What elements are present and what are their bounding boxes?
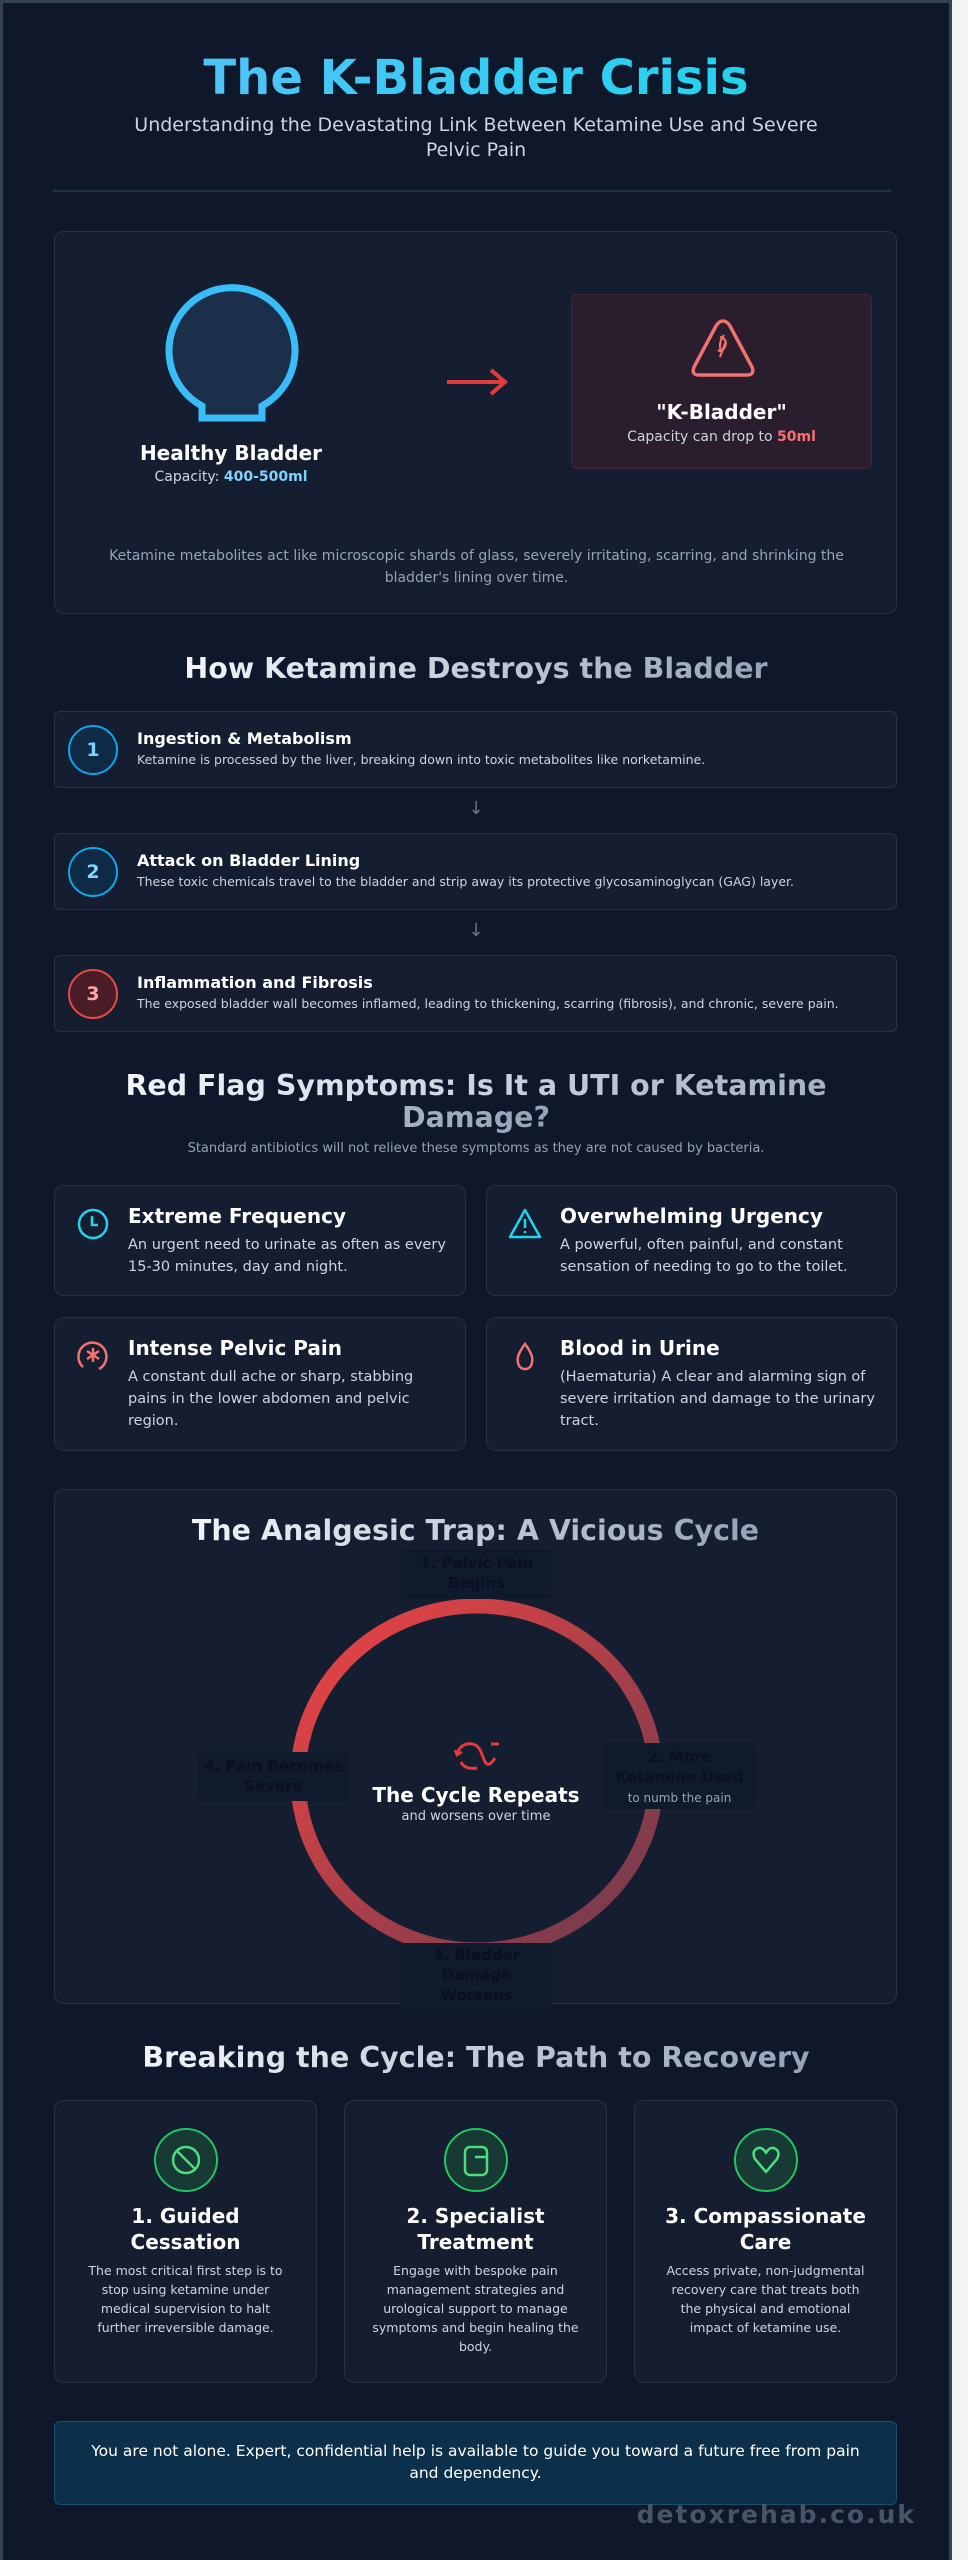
label 3: Worsens (440, 1986, 513, 2004)
symptoms subtitle: Standard antibiotics will not relieve these symptoms as they are not caused by bacteria. (188, 1141, 764, 1156)
label 4: Severe (244, 1777, 303, 1795)
step 1: 1 (86, 739, 100, 761)
description: Ketamine metabolites act like microscopic shards of glass, severely irritating, scarring, and shrinking the bladder's lining over time. (109, 548, 844, 586)
recovery 2: Treatment (417, 2230, 534, 2254)
symptom: blood in urine: Blood in Urine (560, 1336, 720, 1360)
label 4 (198, 1752, 349, 1801)
cycle heading: The Analgesic Trap: A Vicious Cycle (192, 1514, 759, 1547)
symptom: urgency: A powerful, often painful, and constant sensation of needing to go to the toilet. (560, 1237, 848, 1275)
callout: You are not alone. Expert, confidential help is available to guide you toward a future free from pain and dependency. (91, 2442, 860, 2482)
recovery 3: 3. Compassionate (665, 2204, 866, 2228)
label 1 (401, 1549, 552, 1599)
cycle ring (292, 1599, 661, 1944)
cycle center text: The Cycle Repeats (372, 1783, 580, 1807)
heading: red flag symptoms: Red Flag Symptoms: Is It a UTI or Ketamine Damage? (125, 1069, 827, 1134)
step 3: Inflammation and Fibrosis (137, 973, 373, 992)
panel: bladder comparison (54, 231, 897, 614)
label 1: 1. Pelvic Pain (420, 1554, 533, 1572)
label 2: Ketamine Used (616, 1768, 743, 1786)
cycle center text (372, 1783, 580, 1824)
label 2: to numb the pain (628, 1791, 731, 1805)
step 2 (54, 833, 897, 910)
icon: healthy bladder (166, 284, 298, 422)
cycle center text: and worsens over time (402, 1809, 550, 1824)
k-bladder box: Capacity can drop to 50ml (627, 429, 816, 445)
label 3: 3. Bladder (433, 1946, 520, 1964)
step 3: 3 (86, 983, 100, 1005)
step 2: 2 (86, 861, 100, 883)
recovery 2 (344, 2100, 607, 2383)
subtitle: Understanding the Devastating Link Between Ketamine Use and Severe Pelvic Pain (134, 114, 818, 161)
recovery 2: Engage with bespoke pain management strategies and urological support to manage symptoms and begin healing the body. (372, 2263, 579, 2354)
symptom: frequency: Extreme Frequency (128, 1204, 346, 1228)
recovery 1: Cessation (131, 2230, 240, 2254)
panel: vicious cycle (54, 1489, 897, 2004)
recovery 3 (634, 2100, 897, 2383)
recovery 1 (54, 2100, 317, 2383)
symptom: frequency: An urgent need to urinate as often as every 15-30 minutes, day and night. (128, 1237, 446, 1275)
k-bladder box (571, 294, 872, 469)
recovery 3: Access private, non-judgmental recovery care that treats both the physical and emotional impact of ketamine use. (666, 2263, 864, 2335)
symptom: frequency (54, 1185, 466, 1296)
step 2: Attack on Bladder Lining (137, 851, 360, 870)
heading: recovery: Breaking the Cycle: The Path to Recovery (142, 2041, 810, 2074)
label 2 (604, 1743, 755, 1809)
step 1: Ketamine is processed by the liver, breaking down into toxic metabolites like norketamine. (137, 752, 705, 767)
label 1: Begins (448, 1574, 505, 1592)
icon: cycle (454, 1742, 499, 1770)
label 3 (401, 1943, 552, 2011)
symptom: urgency (486, 1185, 897, 1296)
symptom: pelvic pain: Intense Pelvic Pain (128, 1336, 342, 1360)
healthy bladder label: Healthy Bladder (140, 441, 322, 465)
symptom: blood in urine: (Haematuria) A clear and alarming sign of severe irritation and damage to the urinary tract. (560, 1369, 875, 1429)
healthy bladder label: Capacity: 400-500ml (154, 469, 308, 485)
symptom: pelvic pain (54, 1317, 466, 1451)
arrow (447, 368, 508, 396)
label 4: 4. Pain Becomes (204, 1757, 343, 1775)
step 1: Ingestion & Metabolism (137, 729, 352, 748)
symptom: urgency: Overwhelming Urgency (560, 1204, 823, 1228)
recovery 1: 1. Guided (131, 2204, 240, 2228)
step 1 (54, 711, 897, 788)
arrow down: ↓ (468, 798, 484, 819)
heading: how ketamine destroys: How Ketamine Destroys the Bladder (184, 652, 768, 685)
recovery 3: Care (740, 2230, 791, 2254)
healthy bladder label (140, 441, 322, 485)
callout (54, 2421, 897, 2505)
arrow down: ↓ (468, 920, 484, 941)
recovery 2: 2. Specialist (406, 2204, 545, 2228)
footer brand: detoxrehab.co.uk (637, 2500, 916, 2529)
k-bladder box: "K-Bladder" (656, 400, 787, 424)
icon: warning (691, 319, 754, 377)
step 3 (54, 955, 897, 1032)
symptom: blood in urine (486, 1317, 897, 1451)
step 2: These toxic chemicals travel to the bladder and strip away its protective glycosaminoglycan (GAG) layer. (137, 874, 794, 889)
step 3: The exposed bladder wall becomes inflamed, leading to thickening, scarring (fibrosis), and chronic, severe pain. (137, 996, 839, 1011)
title: The K-Bladder Crisis (203, 50, 749, 106)
label 3: Damage (442, 1966, 511, 1984)
symptom: pelvic pain: A constant dull ache or sharp, stabbing pains in the lower abdomen and pelvic region. (128, 1369, 413, 1429)
recovery 1: The most critical first step is to stop using ketamine under medical supervision to halt further irreversible damage. (88, 2263, 283, 2335)
label 2: 2. More (647, 1748, 712, 1766)
